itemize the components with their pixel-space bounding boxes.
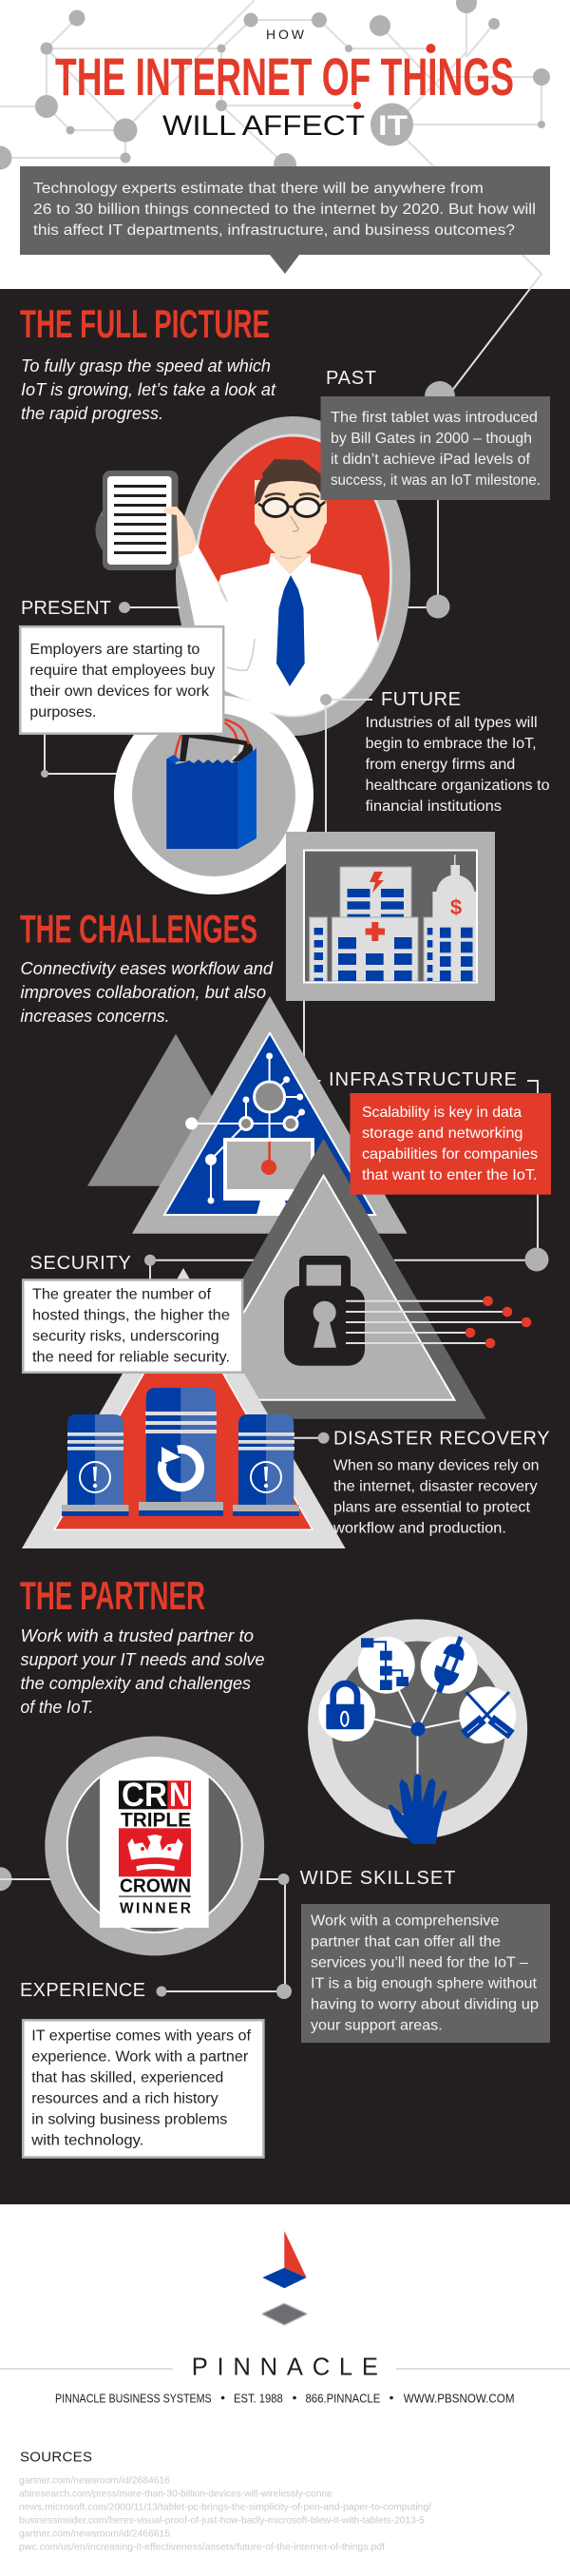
illustration: CRN triple crown badge: N <box>169 1777 190 1814</box>
title: IT <box>378 110 408 142</box>
company tagline: PINNACLE BUSINESS SYSTEMS <box>55 2391 212 2405</box>
experience text box: IT expertise comes with years of <box>31 2028 252 2045</box>
present label: PRESENT <box>21 598 111 619</box>
illustration: security triangle with lock <box>162 1139 531 1419</box>
full picture intro text: IoT is growing, let’s take a look at <box>21 380 276 399</box>
infrastructure text box: storage and networking <box>362 1125 522 1142</box>
icon: centre server with restore arrow <box>139 1388 223 1516</box>
heading: the full picture: THE FULL PICTURE <box>20 301 270 346</box>
heading: the challenges: THE CHALLENGES <box>20 907 257 952</box>
sources heading: SOURCES <box>20 2449 92 2466</box>
illustration: CRN triple crown badge: WINNER <box>120 1901 191 1917</box>
illustration: CRN triple crown badge: TRIPLE <box>121 1810 191 1832</box>
illustration: businessman with tablet <box>176 416 410 736</box>
security text box: the need for reliable security. <box>32 1350 230 1366</box>
past label: PAST <box>326 368 376 389</box>
experience text box: experience. Work with a partner <box>31 2049 249 2066</box>
intro callout: this affect IT departments, infrastructure, and business outcomes? <box>33 222 515 239</box>
infrastructure text box: capabilities for companies <box>362 1146 538 1163</box>
present text box: require that employees buy <box>29 663 215 679</box>
wide skillset label: WIDE SKILLSET <box>300 1868 456 1889</box>
sources list: news.microsoft.com/2000/11/13/tablet-pc-brings-the-simplicity-of-pen-and-paper-to-computing/ <box>19 2501 431 2512</box>
security text box: security risks, underscoring <box>32 1329 219 1345</box>
full picture intro text: the rapid progress. <box>21 404 163 423</box>
future text: begin to embrace the IoT, <box>366 736 537 752</box>
security label: SECURITY <box>29 1253 131 1274</box>
challenges intro text: increases concerns. <box>21 1007 169 1026</box>
partner intro text: of the IoT. <box>21 1698 93 1717</box>
present text box <box>20 626 223 734</box>
icon: crown <box>127 1835 183 1871</box>
experience text box: with technology. <box>30 2133 143 2149</box>
future text: from energy firms and <box>366 757 515 773</box>
wide skillset text box: IT is a big enough sphere without <box>311 1975 538 1991</box>
intro callout: Technology experts estimate that there will be anywhere from <box>33 181 484 197</box>
experience label: EXPERIENCE <box>20 1980 145 2001</box>
wide skillset text box: partner that can offer all the <box>311 1933 501 1950</box>
future text: healthcare organizations to <box>366 778 550 794</box>
full picture intro text: To fully grasp the speed at which <box>21 356 271 375</box>
disaster recovery label: DISASTER RECOVERY <box>333 1428 550 1449</box>
past text box: it didn’t achieve iPad levels of <box>331 452 531 468</box>
security text box <box>23 1279 242 1373</box>
disaster recovery text: workflow and production. <box>332 1521 506 1537</box>
wide skillset text box: having to worry about dividing up <box>311 1996 539 2012</box>
disaster recovery connector <box>294 1432 330 1444</box>
present text box: purposes. <box>29 704 96 721</box>
icon: shopping bag with tablet <box>114 695 314 894</box>
challenges intro text <box>21 959 274 1026</box>
partner intro text: support your IT needs and solve <box>21 1650 264 1669</box>
past text box <box>321 396 550 500</box>
past text box: success, it was an IoT milestone. <box>331 472 541 489</box>
illustration: disaster recovery triangle with servers <box>22 1268 346 1548</box>
experience text box: in solving business problems <box>31 2112 227 2128</box>
partner intro text <box>21 1626 264 1717</box>
sources list: gartner.com/newsroom/id/2466615 <box>19 2528 170 2539</box>
header network decoration <box>0 0 550 392</box>
title: HOW <box>266 27 305 42</box>
partner intro text: Work with a trusted partner to <box>21 1626 254 1645</box>
wide skillset text box <box>301 1904 550 2043</box>
future text: Industries of all types will <box>366 715 538 731</box>
icon: crossed screwdrivers <box>464 1692 511 1735</box>
disaster recovery text <box>332 1458 540 1537</box>
icon: blue hand <box>389 1774 447 1844</box>
title: WILL AFFECT <box>162 110 365 142</box>
present text box: their own devices for work <box>29 683 210 700</box>
company tagline: EST. 1988 <box>234 2391 283 2405</box>
disaster recovery text: When so many devices rely on <box>333 1458 540 1474</box>
wide skillset text box: your support areas. <box>311 2017 443 2033</box>
company tagline: WWW.PBSNOW.COM <box>404 2391 515 2405</box>
sources list <box>19 2474 431 2552</box>
present connector <box>41 602 180 778</box>
intro callout: 26 to 30 billion things connected to the internet by 2020. But how will <box>33 202 536 218</box>
future text <box>366 715 550 815</box>
icon: right server <box>233 1414 299 1516</box>
full picture intro text <box>21 356 276 423</box>
partner connectors <box>0 1867 292 1999</box>
dark content background <box>0 289 570 2204</box>
wide skillset text box: Work with a comprehensive <box>311 1913 499 1929</box>
icon: power plug <box>428 1632 472 1697</box>
connector: past and future nodes <box>404 381 455 618</box>
experience text box: that has skilled, experienced <box>31 2070 223 2086</box>
past text box: The first tablet was introduced <box>331 410 538 426</box>
illustration: hand with service icons <box>308 1620 527 1844</box>
experience text box: resources and a rich history <box>31 2091 218 2107</box>
icon: padlock <box>326 1683 364 1729</box>
wide skillset text box: services you’ll need for the IoT – <box>311 1954 528 1970</box>
security text box: The greater the number of <box>32 1287 212 1303</box>
sources list: businessinsider.com/heres-visual-proof-of-just-how-badly-microsoft-blew-it-with-tablets-2013-5 <box>19 2514 425 2526</box>
intro callout <box>20 166 550 274</box>
illustration: infrastructure triangle circuit <box>132 996 408 1234</box>
disaster recovery text: plans are essential to protect <box>333 1500 531 1516</box>
logo mark <box>262 2231 307 2325</box>
connector: city to infrastructure <box>304 998 321 1081</box>
illustration: CRN triple crown badge: CR <box>122 1777 167 1814</box>
infrastructure label: INFRASTRUCTURE <box>329 1069 517 1090</box>
security text box: hosted things, the higher the <box>32 1308 230 1324</box>
experience text box <box>23 2020 263 2158</box>
present text box: Employers are starting to <box>29 642 200 658</box>
disaster recovery text: the internet, disaster recovery <box>333 1479 538 1495</box>
company tagline <box>55 2391 515 2405</box>
title <box>55 27 514 142</box>
illustration: CRN triple crown badge: CROWN <box>120 1876 191 1897</box>
future label: FUTURE <box>381 689 461 710</box>
sources list: abiresearch.com/press/more-than-30-billion-devices-will-wirelessly-conne <box>19 2488 332 2499</box>
future connector <box>320 694 372 836</box>
future text: financial institutions <box>366 798 502 815</box>
past text box: by Bill Gates in 2000 – though <box>331 431 532 447</box>
company tagline: 866.PINNACLE <box>306 2391 380 2405</box>
illustration: city buildings: $ <box>450 895 462 919</box>
illustration: city buildings <box>286 832 495 1001</box>
connector: infrastructure to security <box>144 1081 549 1280</box>
background triangle <box>87 1034 264 1186</box>
icon: flow chart <box>361 1638 408 1690</box>
icon: tablet device <box>95 471 197 570</box>
illustration: CRN triple crown badge <box>45 1737 264 1955</box>
sources list: pwc.com/us/en/increasing-it-effectiveness/assets/future-of-the-internet-of-things.pdf <box>19 2541 385 2552</box>
sources list: gartner.com/newsroom/id/2684616 <box>19 2474 170 2486</box>
challenges intro text: improves collaboration, but also <box>21 983 266 1002</box>
heading: the partner: THE PARTNER <box>20 1573 205 1618</box>
challenges intro text: Connectivity eases workflow and <box>21 959 274 978</box>
partner intro text: the complexity and challenges <box>21 1674 251 1693</box>
icon: left server <box>62 1414 129 1516</box>
logo wordmark with rules: PINNACLE <box>192 2354 378 2380</box>
infrastructure text box <box>350 1093 551 1195</box>
infrastructure text box: that want to enter the IoT. <box>362 1167 538 1183</box>
infrastructure text box: Scalability is key in data <box>362 1105 522 1121</box>
